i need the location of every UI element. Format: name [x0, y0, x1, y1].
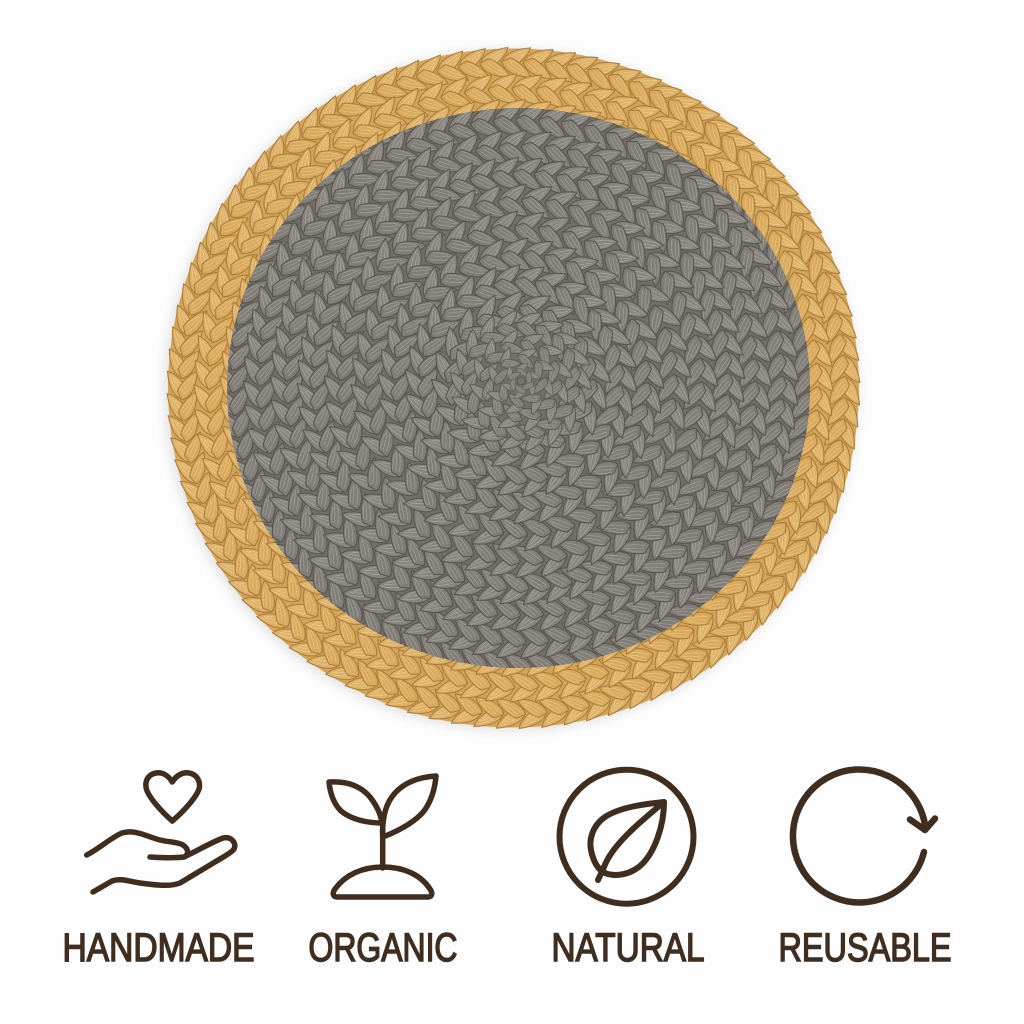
label: reusable: REUSABLE — [778, 926, 952, 970]
label: natural: NATURAL — [552, 926, 704, 970]
mat gray braided center — [227, 108, 810, 668]
mat soft shadow — [165, 50, 857, 730]
woven round placemat — [162, 46, 860, 734]
icon: hand holding heart — [87, 773, 235, 892]
icon: leaf in circle — [560, 770, 694, 904]
labels row — [62, 926, 952, 970]
icon: sprout — [329, 776, 436, 897]
infographic canvas — [64, 46, 951, 962]
icon: circular reuse arrow — [793, 769, 935, 902]
label: handmade: HANDMADE — [62, 926, 254, 970]
label: organic: ORGANIC — [308, 926, 458, 970]
